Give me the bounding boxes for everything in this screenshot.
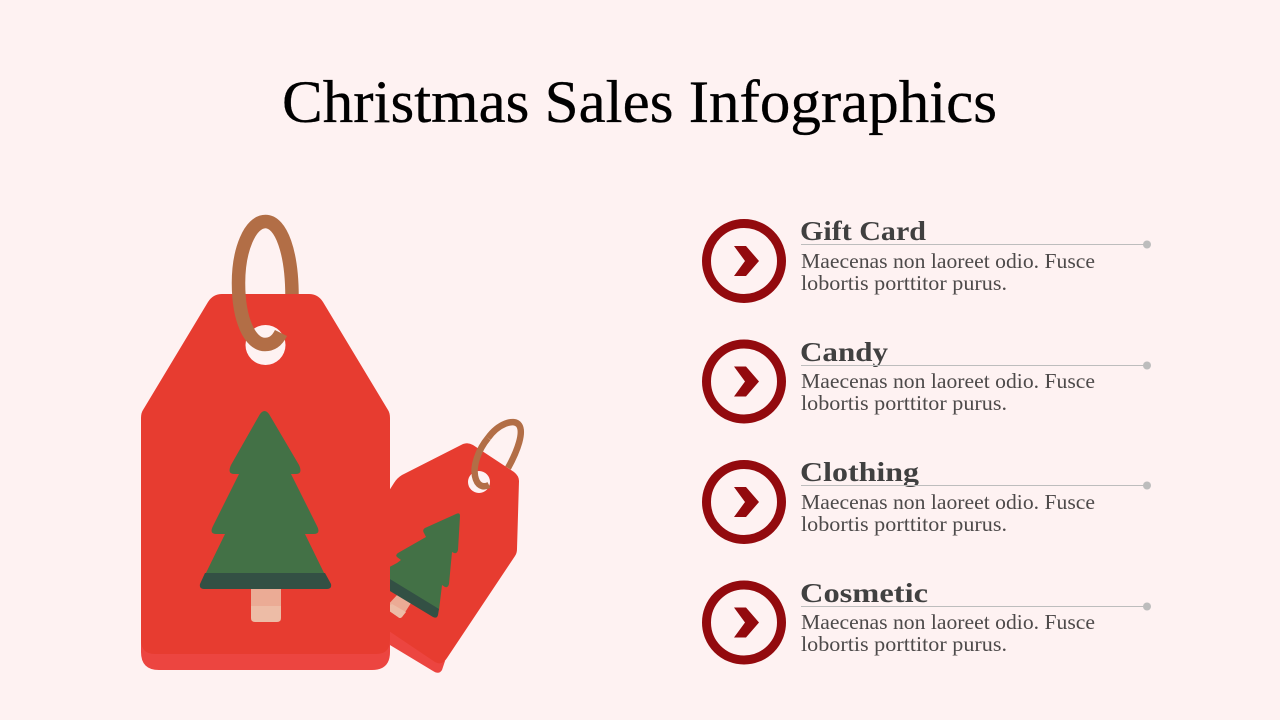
description: lobortis porttitor purus.: [801, 271, 1007, 295]
description: [801, 610, 1095, 656]
small tree trunk: [385, 594, 411, 618]
large tree trunk: [251, 589, 281, 606]
title: Christmas Sales Infographics: [282, 69, 997, 135]
small tree foliage: [380, 513, 460, 610]
heading: Candy: [800, 336, 888, 367]
large tree foliage: [204, 411, 326, 577]
large tag ring back: [238, 222, 292, 300]
description: Maecenas non laoreet odio. Fusce: [801, 249, 1095, 273]
large tree trunk lower: [251, 606, 281, 622]
heading: Cosmetic: [800, 577, 928, 608]
large tag ring front: [238, 283, 281, 344]
icon: chevron circle: [706, 224, 782, 298]
description: lobortis porttitor purus.: [801, 512, 1007, 536]
small tag ring front: [475, 438, 489, 486]
connector line: [801, 482, 1151, 490]
large tag body: [141, 294, 390, 654]
icon: chevron circle: [706, 344, 782, 419]
small tree trunk lower: [385, 604, 406, 618]
small tag lower edge: [380, 620, 445, 673]
description: [801, 369, 1095, 415]
large tag lower edge: [141, 630, 390, 670]
description: Maecenas non laoreet odio. Fusce: [801, 610, 1095, 634]
illustration: price tags: [141, 222, 521, 673]
small price tag: [380, 422, 521, 673]
description: lobortis porttitor purus.: [801, 632, 1007, 656]
description: Maecenas non laoreet odio. Fusce: [801, 490, 1095, 514]
small tag body: [380, 443, 519, 663]
connector line: [801, 602, 1151, 610]
item: Candy: [706, 336, 1151, 419]
description: Maecenas non laoreet odio. Fusce: [801, 369, 1095, 393]
small tag ring back: [488, 422, 521, 468]
icon: chevron circle: [706, 585, 782, 660]
large tree base: [200, 573, 331, 589]
item: Gift Card: [706, 215, 1151, 298]
large tag hole: [246, 325, 286, 365]
description: [801, 249, 1095, 295]
item: Cosmetic: [706, 577, 1151, 660]
connector line: [801, 362, 1151, 370]
icon: chevron circle: [706, 464, 782, 540]
heading: Clothing: [800, 456, 919, 487]
heading: Gift Card: [800, 215, 926, 246]
small tag hole: [468, 471, 490, 493]
description: lobortis porttitor purus.: [801, 391, 1007, 415]
item: Clothing: [706, 456, 1151, 540]
small tree base: [380, 573, 439, 618]
connector line: [801, 240, 1151, 248]
description: [801, 490, 1095, 536]
